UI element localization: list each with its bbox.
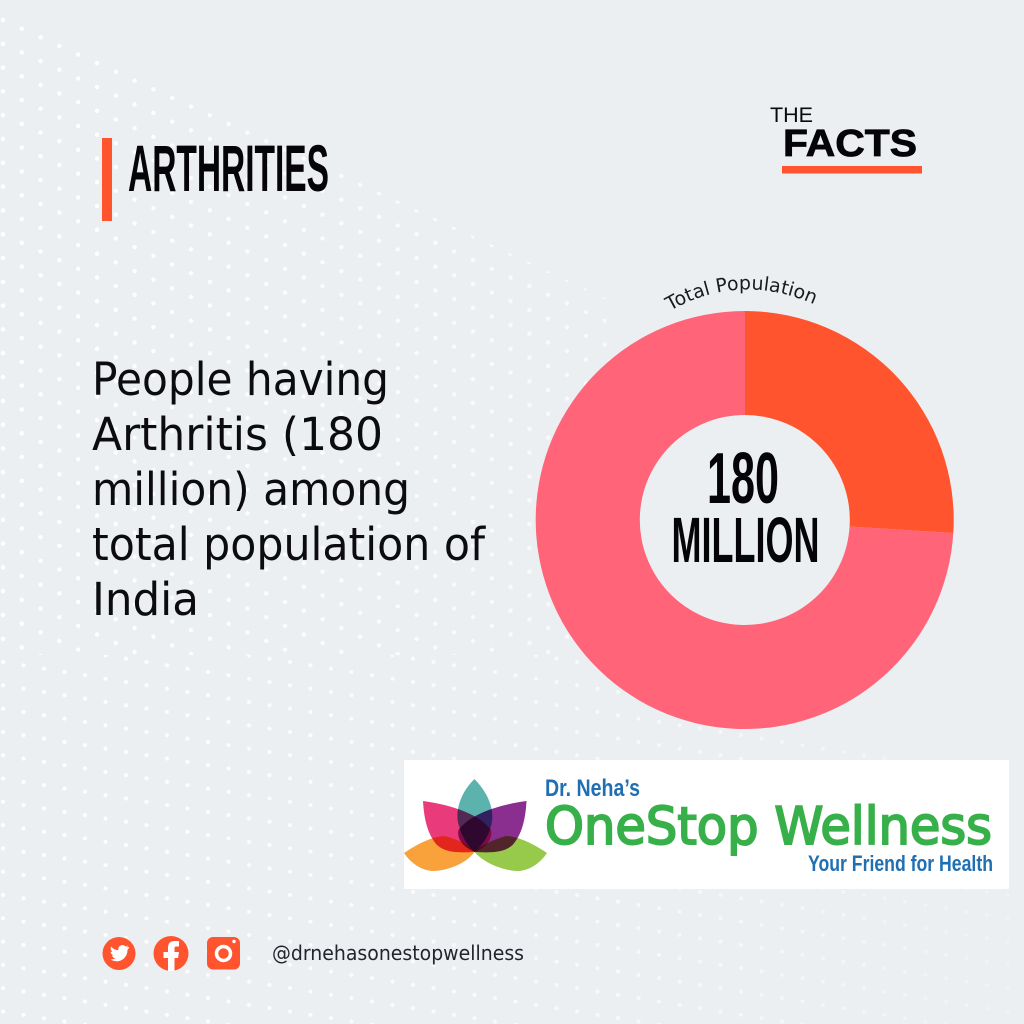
logo text: Dr. Neha's: Dr. Neha’s [545,775,640,802]
accent bar: title [102,138,112,221]
center label: 180 million [672,439,820,576]
icon: lotus [404,779,547,871]
brand mark: The Facts: FACTS [783,123,917,165]
center label: 180 million: 180 [707,439,779,519]
brand mark: The Facts [770,103,922,174]
text block: description: India [92,573,199,626]
logo panel: Dr. Neha's OneStop Wellness [404,760,1009,889]
curved label: Total Population: Total Population [663,276,816,309]
icon: facebook [154,936,188,971]
heading: Arthrities: ARTHRITIES [128,131,329,205]
text block: description: million) among [92,463,410,516]
brand mark: The Facts: THE [770,103,813,127]
text block: description [92,353,486,626]
donut segment: rest of population [536,311,953,729]
social icons [102,936,240,971]
donut chart: 180 million of total population [536,276,954,729]
logo text: OneStop Wellness: OneStop Wellness [545,797,992,857]
icon: twitter [102,937,136,970]
text block: description: Arthritis (180 [92,408,383,461]
donut segment: 180 million [745,311,954,533]
icon: instagram [207,937,240,970]
text block: description: People having [92,353,389,406]
center label: 180 million: MILLION [672,504,820,576]
text block: description: total population of [92,518,486,571]
social handle: @drnehasonestopwellness [272,941,524,965]
